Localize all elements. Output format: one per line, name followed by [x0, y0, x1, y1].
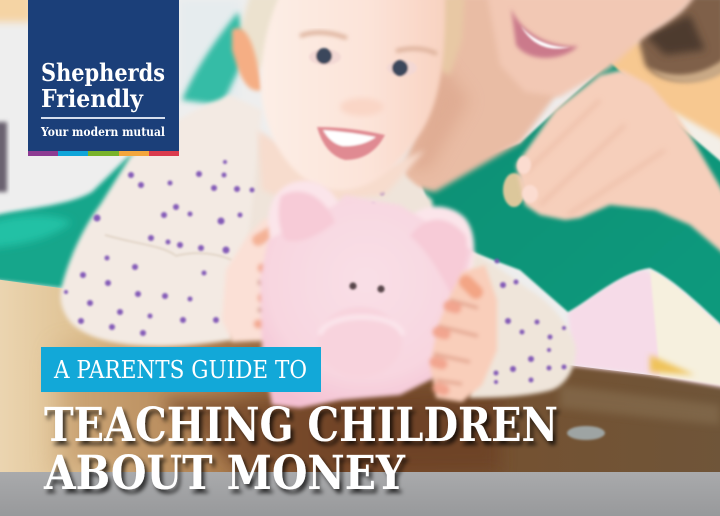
photo: child's face [261, 0, 445, 190]
subtitle banner [41, 347, 321, 392]
subtitle banner: A PARENTS GUIDE TO [53, 355, 307, 384]
logo panel: Shepherds Friendly [28, 0, 179, 156]
photo: mother's hand holding coin [503, 70, 720, 255]
photo: child's ear [232, 28, 262, 91]
photo: child's smile [317, 127, 385, 160]
photo: piggy bank body [260, 195, 472, 408]
photo: polka dots on dress [64, 160, 566, 384]
logo name: Friendly [41, 84, 144, 113]
photo: child's eyes [309, 48, 417, 76]
photo: mother's face and smile [487, 0, 695, 97]
photo: child's eyebrows [300, 32, 437, 54]
photo: piggy bank ears [268, 181, 342, 240]
photo: piggy bank eyes [349, 282, 385, 293]
photo: pink and cream cushion [568, 270, 720, 388]
photo: child's right arm sleeve [465, 250, 576, 398]
photo: mother's hair [638, 0, 720, 83]
photo: child's left arm sleeve [60, 95, 262, 346]
photo: wooden table [0, 279, 720, 480]
photo: child's right hand [430, 265, 497, 402]
title: TEACHING CHILDREN [44, 398, 558, 453]
photo: mother's green top [420, 62, 720, 328]
logo name [41, 58, 165, 113]
photo: coin on table [567, 426, 605, 440]
photo: child's hair [240, 0, 465, 75]
photo: mother's teal sleeve and shoulder [0, 12, 248, 290]
photo: child's neck [258, 130, 425, 205]
photo: piggy bank [260, 181, 474, 408]
photo: piggy bank snout [318, 307, 402, 377]
bottom grey band [0, 472, 720, 516]
photo: mother's neck and chest [400, 0, 560, 192]
logo name: Shepherds [41, 58, 165, 87]
title [43, 398, 558, 501]
photo: child's nose [340, 98, 384, 116]
photo: child's left hand [222, 218, 280, 342]
logo colour stripe [28, 151, 179, 156]
logo tagline: Your modern mutual [40, 124, 165, 139]
title: ABOUT MONEY [43, 446, 405, 501]
photo: child's dress body [225, 100, 440, 260]
